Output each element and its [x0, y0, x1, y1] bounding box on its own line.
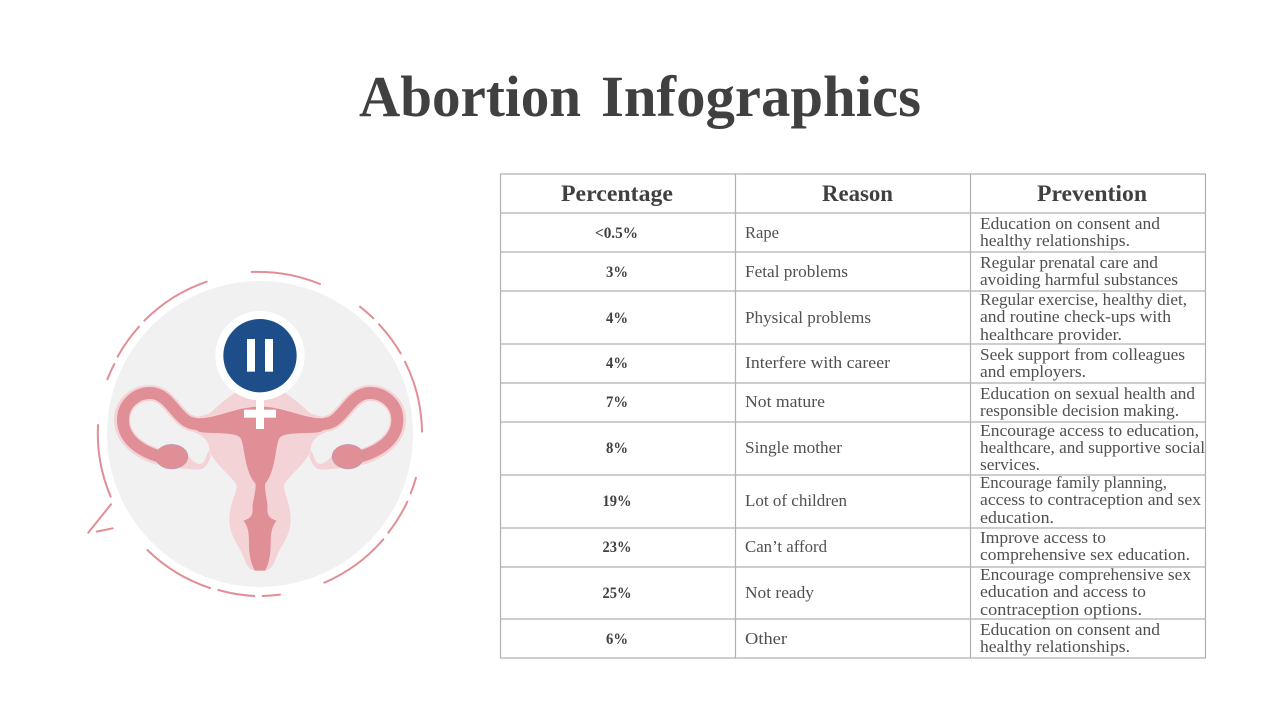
column: prevention: avoiding harmful substances — [980, 270, 1178, 289]
column: reason: Can’t afford — [745, 537, 827, 556]
column: prevention: Education on consent and — [980, 620, 1161, 639]
table — [500, 174, 1206, 658]
column: prevention: access to contraception and sex — [980, 490, 1202, 509]
column: percentage: 4% — [606, 355, 628, 372]
table grid — [500, 174, 1206, 658]
column: prevention: and routine check-ups with — [980, 307, 1172, 326]
column: prevention: Regular exercise, healthy diet, — [980, 290, 1187, 309]
column: percentage: 8% — [606, 440, 628, 457]
column: prevention: and employers. — [980, 362, 1086, 381]
background circle — [107, 281, 413, 587]
column: reason — [745, 223, 890, 648]
column: reason: Other — [745, 629, 787, 648]
title — [359, 64, 921, 129]
column: prevention: healthcare provider. — [980, 325, 1122, 344]
column: prevention: healthy relationships. — [980, 231, 1130, 250]
column: prevention: education. — [980, 508, 1054, 527]
left ovary — [155, 444, 188, 469]
column: percentage: 19% — [602, 493, 632, 510]
column: percentage: 3% — [606, 264, 628, 281]
column: reason: Physical problems — [745, 308, 871, 327]
table header: Reason — [822, 181, 893, 206]
column: reason: Rape — [745, 223, 779, 242]
column: prevention: Education on consent and — [980, 214, 1161, 233]
icon: female symbol with pause — [215, 311, 305, 429]
column: reason: Single mother — [745, 438, 842, 457]
column: percentage: 25% — [602, 585, 632, 602]
right ovary — [332, 444, 364, 469]
column: reason: Lot of children — [745, 491, 847, 510]
column: reason: Interfere with career — [745, 353, 890, 372]
column: reason: Fetal problems — [745, 262, 848, 281]
table header: Prevention — [1037, 181, 1147, 206]
column: percentage: 7% — [606, 394, 628, 411]
column: prevention: education and access to — [980, 582, 1146, 601]
column: percentage: <0.5% — [595, 225, 638, 242]
dashed speech bubble outline — [88, 272, 422, 596]
column: prevention: healthy relationships. — [980, 637, 1130, 656]
column: reason: Not mature — [745, 392, 825, 411]
column: prevention: Encourage family planning, — [980, 473, 1167, 492]
column: prevention: Regular prenatal care and — [980, 253, 1159, 272]
column: prevention: Seek support from colleagues — [980, 345, 1185, 364]
column: reason: Not ready — [745, 583, 814, 602]
uterus light tissue — [122, 393, 398, 571]
column: percentage: 23% — [602, 539, 632, 556]
column: percentage: 4% — [606, 310, 628, 327]
column: prevention: Improve access to — [980, 528, 1106, 547]
column: prevention: Encourage comprehensive sex — [980, 565, 1192, 584]
column: prevention: responsible decision making. — [980, 401, 1179, 420]
column: prevention: comprehensive sex education. — [980, 545, 1190, 564]
table header: Percentage — [561, 181, 673, 206]
uterus dark body and tubes — [123, 393, 397, 571]
column: prevention: healthcare, and supportive social — [980, 438, 1205, 457]
column: prevention: Education on sexual health and — [980, 384, 1196, 403]
title: Infographics — [601, 64, 921, 129]
illustration: uterus in speech bubble — [88, 272, 422, 596]
column: percentage — [595, 225, 638, 648]
column: prevention: Encourage access to education, — [980, 421, 1199, 440]
column: prevention: services. — [980, 455, 1040, 474]
column: percentage: 6% — [606, 631, 628, 648]
title: Abortion — [359, 64, 581, 129]
column: prevention — [980, 214, 1205, 656]
table header — [561, 181, 1147, 206]
column: prevention: contraception options. — [980, 600, 1142, 619]
